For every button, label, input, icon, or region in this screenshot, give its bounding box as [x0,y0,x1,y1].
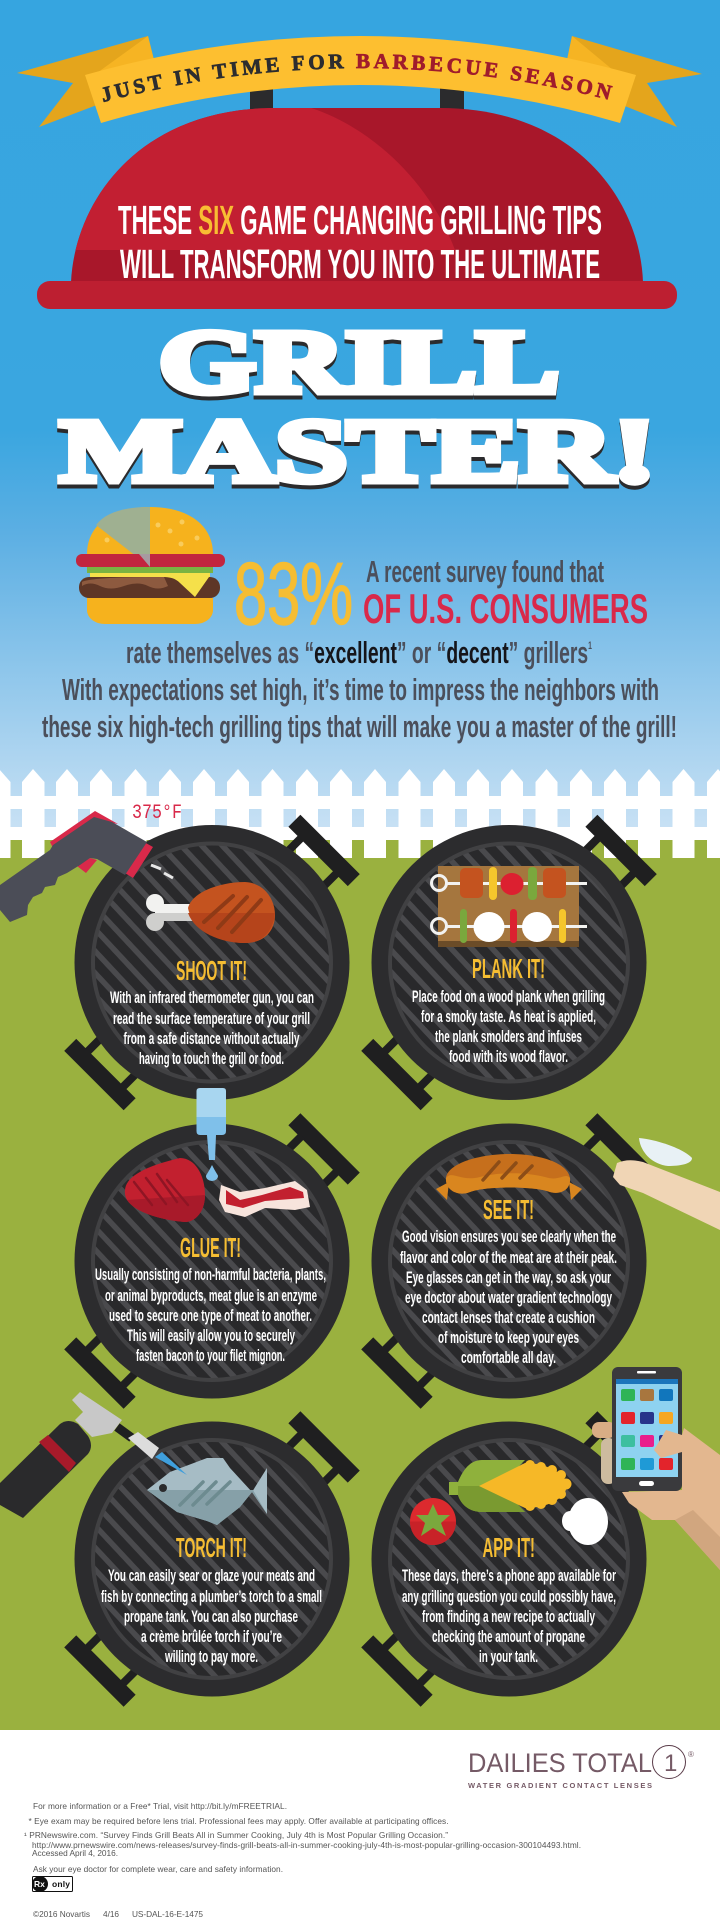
Rx only badge [32,1876,72,1892]
text: With an infrared thermometer gun, you can [110,988,314,1007]
footer [0,1730,720,1920]
footnotes: * Eye exam may be required before lens trial. Professional fees may apply. Offer available at participating offices. [28,1816,448,1826]
panel: see it [361,1113,657,1409]
footnotes: http://www.prnewswire.com/news-releases/survey-finds-grill-beats-all-in-summer-cooking-july-4th-is-most-popular-grilling-occasion-300104493.html. [32,1840,581,1850]
panel: glue it [64,1088,360,1409]
text: used to secure one type of meat to another. [109,1306,312,1325]
text: fasten bacon to your filet mignon. [136,1346,285,1365]
text: fish by connecting a plumber’s torch to a small [101,1587,322,1606]
logo: Dailies Total 1: ® [688,1750,694,1759]
title: Grill Master: MASTER! [60,406,656,505]
text: having to touch the grill or food. [139,1049,284,1068]
title: Grill Master: GRILL [159,317,559,416]
text: checking the amount of propane [432,1627,585,1646]
Rx only badge: only [52,1879,70,1889]
text: from finding a new recipe to actually [422,1607,595,1626]
heading: APP IT! [482,1532,535,1563]
intro paragraph: rate themselves as “excellent” or “decent” grillers [126,635,636,670]
text: food with its wood flavor. [449,1047,568,1066]
heading: six tips [118,197,602,287]
icon: skewers on plank [432,866,587,947]
text: You can easily sear or glaze your meats and [108,1566,315,1585]
grill [64,815,360,1110]
grill [361,815,657,1110]
icon: drumstick [146,882,275,943]
white picket fence [0,769,720,858]
grill [361,1113,657,1409]
text [400,1227,617,1367]
intro paragraph: 1 [588,640,592,652]
footnotes: ¹ PRNewswire.com. “Survey Finds Grill Beats All in Summer Cooking, July 4th is Most Popular Grilling Occasion.” [24,1830,448,1840]
grass [0,840,720,1730]
text: contact lenses that create a cushion [422,1308,595,1327]
icon: tomato [410,1498,456,1545]
icon: plumber's torch [0,1392,187,1518]
panel: plank it [361,815,657,1110]
text: propane tank. You can also purchase [124,1607,298,1626]
logo: Dailies Total 1 [468,1746,694,1790]
text [402,1566,616,1666]
logo: Dailies Total 1: 1 [664,1750,677,1777]
banner text: JUST IN TIME FOR BARBECUE SEASON [102,54,613,102]
text: or animal byproducts, meat glue is an enzyme [105,1286,317,1305]
copyright line [33,1909,203,1919]
logo: Dailies Total 1: DAILIES TOTAL [468,1748,652,1778]
grill lid illustration [37,88,677,309]
text: a crème brûlée torch if you’re [141,1627,282,1646]
text: read the surface temperature of your grill [113,1009,310,1028]
heading: PLANK IT! [472,953,545,984]
text [101,1566,322,1666]
icon: corn [449,1460,572,1512]
icon: fish [147,1458,267,1525]
text: for a smoky taste. As heat is applied, [421,1007,596,1026]
text: the plank smolders and infuses [435,1027,582,1046]
intro paragraph [42,635,677,744]
grill [64,1113,360,1409]
icon: sausage [436,1154,582,1200]
survey text [363,554,648,632]
icon: bacon [219,1181,310,1217]
heading: SHOOT IT! [176,955,247,986]
banner ribbon [17,36,702,127]
grill [361,1411,657,1707]
logo: Dailies Total 1: WATER GRADIENT CONTACT LENSES [468,1781,652,1790]
title: Grill Master: MASTER! [60,402,656,501]
text: willing to pay more. [164,1647,258,1666]
grill [64,1411,360,1707]
text [412,987,605,1066]
icon: steak [125,1158,205,1222]
Rx only badge: Rx [34,1879,45,1889]
icon: hand holding phone [592,1367,720,1570]
icon: mushroom [562,1498,608,1545]
temperature reading: 375°F [132,802,182,825]
copyright line: US-DAL-16-E-1475 [132,1909,203,1919]
text: in your tank. [479,1647,538,1666]
icon: glue bottle [196,1088,226,1181]
footnotes: Accessed April 4, 2016. [32,1848,118,1858]
panel: shoot it [64,815,360,1110]
heading: SEE IT! [483,1194,534,1225]
icon: infrared thermometer gun [0,802,182,922]
footnotes: Ask your eye doctor for complete wear, care and safety information. [33,1864,283,1874]
text: of moisture to keep your eyes [438,1328,579,1347]
panel: torch it [64,1411,360,1707]
sky background [0,0,720,860]
panel: app it [361,1411,657,1707]
text: from a safe distance without actually [124,1029,300,1048]
copyright line: ©2016 Novartis [33,1909,90,1919]
text: comfortable all day. [461,1348,556,1367]
title: Grill Master: GRILL [159,313,559,412]
heading: GLUE IT! [180,1232,241,1263]
heading: TORCH IT! [176,1532,247,1563]
icon: burger [76,507,225,624]
text: Usually consisting of non-harmful bacteria, plants, [95,1265,326,1284]
title: Grill Master [60,313,656,505]
text [110,988,314,1068]
text [95,1265,326,1365]
text: This will easily allow you to securely [127,1326,295,1345]
copyright line: 4/16 [103,1909,119,1919]
icon: finger with contact lens [613,1138,720,1230]
stat: 83%: 83% [234,544,353,643]
footnotes [24,1801,581,1874]
footnotes: For more information or a Free* Trial, visit http://bit.ly/mFREETRIAL. [33,1801,287,1811]
